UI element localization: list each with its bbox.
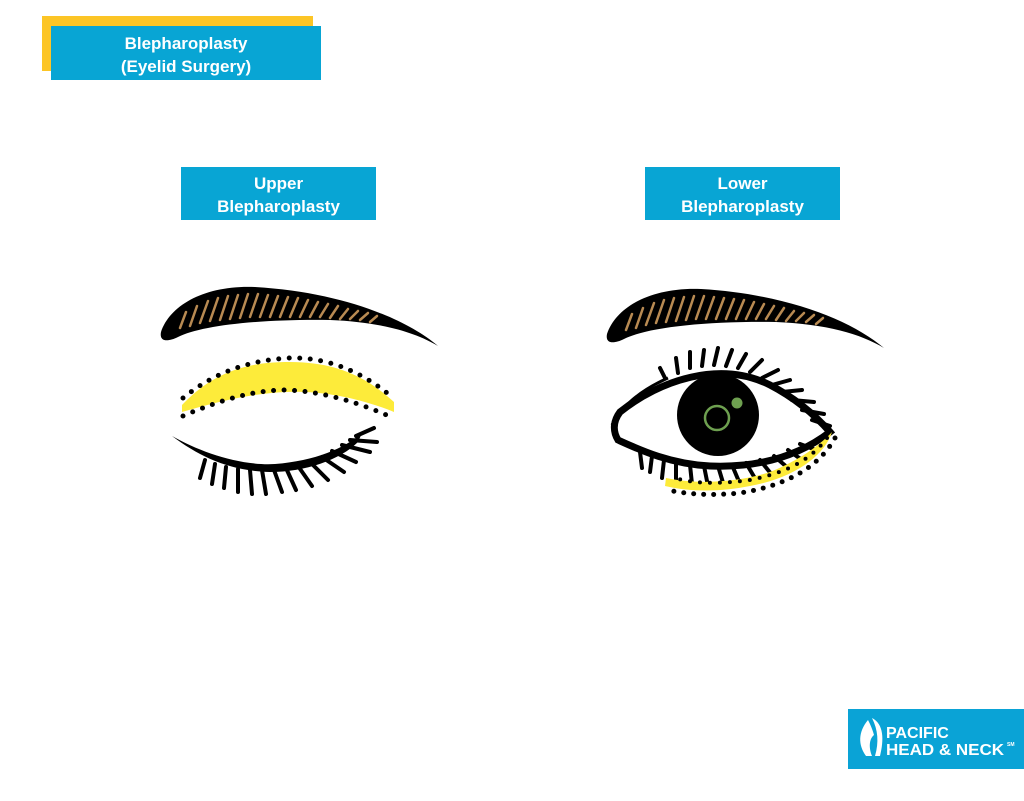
label: lower blepharoplasty: Blepharoplasty bbox=[681, 197, 804, 216]
yellow area: upper eyelid bbox=[182, 358, 394, 418]
iris bbox=[677, 374, 759, 456]
yellow area: lower eyelid bbox=[665, 432, 832, 490]
logo: HEAD & NECK bbox=[886, 742, 1004, 759]
logo: SM bbox=[1007, 742, 1014, 748]
title: (Eyelid Surgery) bbox=[121, 57, 251, 76]
label: upper blepharoplasty bbox=[181, 167, 376, 220]
eyebrow: right bbox=[607, 289, 884, 348]
label: upper blepharoplasty: Upper bbox=[254, 174, 303, 193]
logo bbox=[848, 709, 1024, 769]
open eye bbox=[612, 348, 835, 494]
label: lower blepharoplasty: Lower bbox=[717, 174, 768, 193]
title: Blepharoplasty bbox=[125, 34, 248, 53]
label: lower blepharoplasty bbox=[645, 167, 840, 220]
title bbox=[42, 16, 321, 80]
logo: PACIFIC bbox=[886, 725, 949, 742]
label: upper blepharoplasty: Blepharoplasty bbox=[217, 197, 340, 216]
eyebrow: left bbox=[161, 287, 438, 346]
closed eye bbox=[172, 428, 377, 494]
